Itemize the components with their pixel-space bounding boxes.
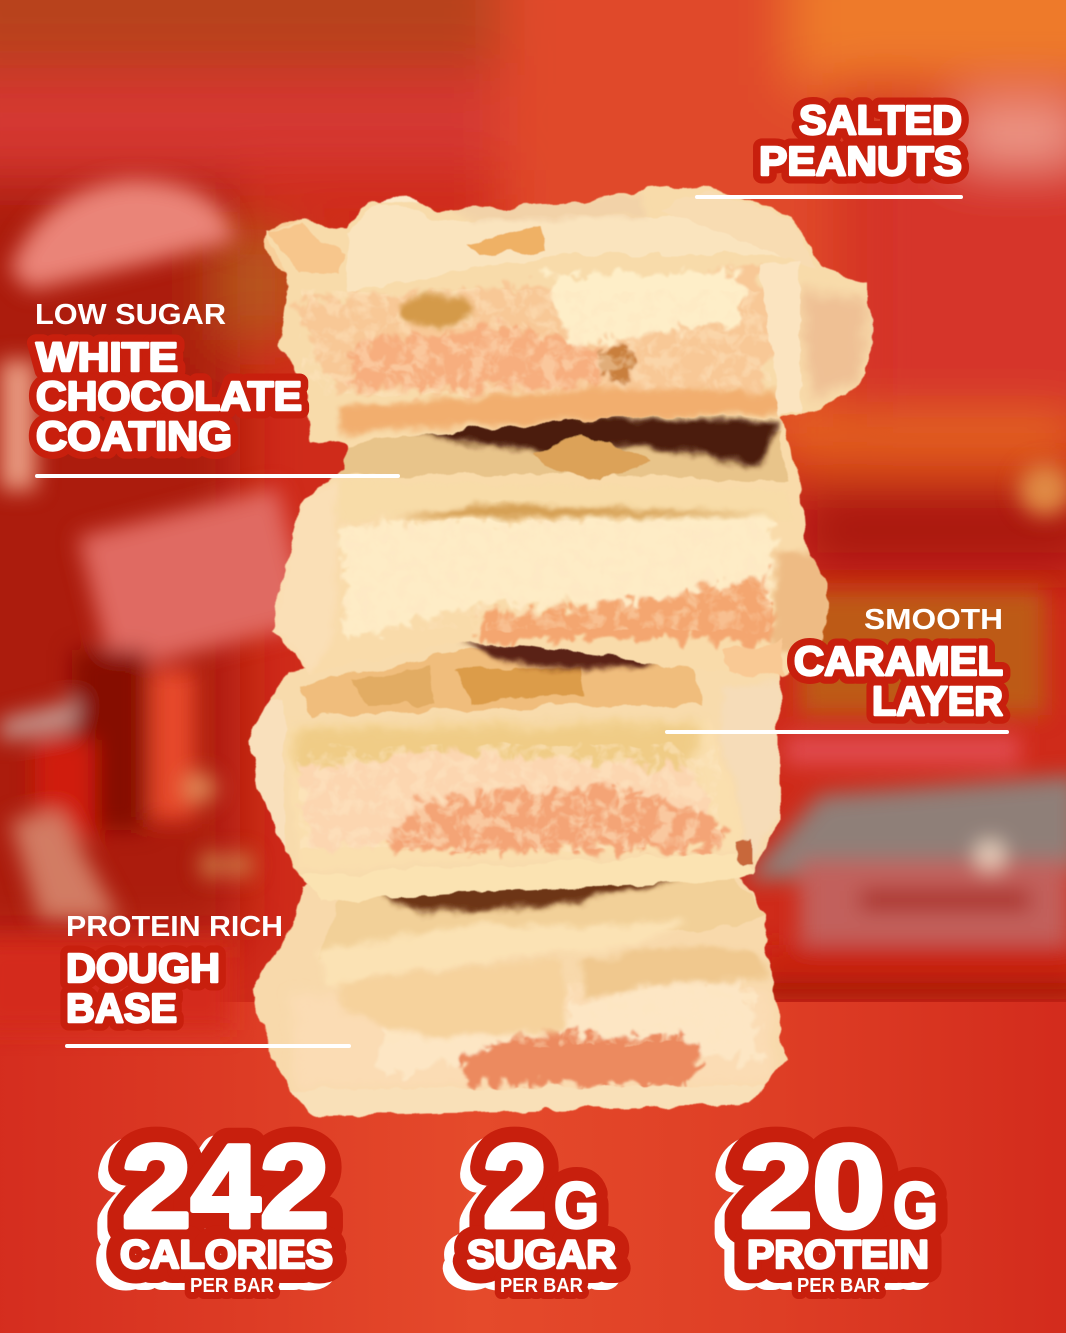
stat: 2g sugar per bar: 2 — [483, 1121, 547, 1253]
stat: 2g sugar per bar: SUGAR — [467, 1233, 616, 1277]
stat: 2g sugar per bar: 2 — [483, 1121, 547, 1253]
stat: 20g protein per bar: 20 — [740, 1121, 885, 1253]
stat: 20g protein per bar: PROTEIN — [737, 1240, 919, 1284]
callout: smooth caramel layer — [794, 604, 1003, 724]
callout: low sugar white chocolate coating: LOW SUGAR — [35, 299, 226, 331]
callout line: salted peanuts — [695, 195, 963, 199]
stat: 242 calories per bar: PER BAR — [190, 1275, 275, 1297]
callout: salted peanuts: PEANUTS — [759, 138, 962, 184]
stat: 2g sugar per bar — [457, 1121, 616, 1297]
stat: 2g sugar per bar: PER BAR — [500, 1275, 584, 1297]
callout: low sugar white chocolate coating — [35, 299, 302, 459]
callout: protein rich dough base: DOUGH — [66, 945, 220, 991]
stat: 2g sugar per bar: G — [554, 1168, 599, 1242]
callout: smooth caramel layer: LAYER — [872, 678, 1003, 724]
callout: protein rich dough base: PROTEIN RICH — [66, 911, 283, 943]
bar 3 — [240, 630, 790, 910]
stat: 20g protein per bar — [730, 1121, 938, 1297]
callout: protein rich dough base: BASE — [66, 985, 177, 1031]
product: stack of four bars — [240, 180, 872, 1125]
stat: 20g protein per bar: PER BAR — [797, 1275, 881, 1297]
callout: smooth caramel layer: SMOOTH — [864, 604, 1003, 636]
stat: 2g sugar per bar: 2 — [473, 1128, 537, 1260]
stat: 242 calories per bar: CALORIES — [120, 1233, 333, 1277]
callout: smooth caramel layer: LAYER — [872, 678, 1003, 724]
callout: low sugar white chocolate coating: CHOCOLATE — [36, 373, 302, 419]
stat: 242 calories per bar: CALORIES — [120, 1233, 333, 1277]
callout: smooth caramel layer: CARAMEL — [794, 638, 1003, 684]
callout: protein rich dough base: DOUGH — [66, 945, 220, 991]
bar 4 — [252, 877, 788, 1118]
bar 2 — [265, 400, 835, 685]
callout: protein rich dough base: BASE — [66, 985, 177, 1031]
stat: 2g sugar per bar: SUGAR — [457, 1240, 606, 1284]
stat: 20g protein per bar: G — [893, 1168, 938, 1242]
stat: 20g protein per bar: G — [893, 1168, 938, 1242]
stat: 242 calories per bar: PER BAR — [190, 1275, 275, 1297]
callout: salted peanuts: PEANUTS — [759, 138, 962, 184]
callout: protein rich dough base — [66, 911, 283, 1031]
stat: 242 calories per bar: 242 — [112, 1128, 319, 1260]
stat: 20g protein per bar: PROTEIN — [747, 1233, 929, 1277]
stat: 20g protein per bar: PER BAR — [797, 1275, 881, 1297]
callout: low sugar white chocolate coating: CHOCOLATE — [36, 373, 302, 419]
stat: 242 calories per bar: CALORIES — [110, 1240, 323, 1284]
callout: low sugar white chocolate coating: WHITE — [36, 334, 178, 380]
callout: low sugar white chocolate coating: COATING — [36, 413, 232, 459]
callout: salted peanuts — [759, 97, 962, 184]
stat: 2g sugar per bar: G — [554, 1168, 599, 1242]
stat: 242 calories per bar: 242 — [122, 1121, 329, 1253]
stat: 20g protein per bar: 20 — [740, 1121, 885, 1253]
stat: 242 calories per bar — [110, 1121, 333, 1297]
callout line: dough base — [65, 1044, 351, 1048]
callout line: white chocolate coating — [35, 474, 400, 478]
stat: 20g protein per bar: 20 — [730, 1128, 875, 1260]
callout: low sugar white chocolate coating: COATING — [36, 413, 232, 459]
callout line: caramel layer — [665, 730, 1009, 734]
callout: salted peanuts: SALTED — [799, 97, 962, 143]
callout: salted peanuts: SALTED — [799, 97, 962, 143]
stat: 2g sugar per bar: SUGAR — [467, 1233, 616, 1277]
callout: smooth caramel layer: CARAMEL — [794, 638, 1003, 684]
callout: low sugar white chocolate coating: WHITE — [36, 334, 178, 380]
stat: 2g sugar per bar: PER BAR — [500, 1275, 584, 1297]
bar 1 — [256, 180, 872, 450]
stat: 242 calories per bar: 242 — [122, 1121, 329, 1253]
stat: 20g protein per bar: PROTEIN — [747, 1233, 929, 1277]
